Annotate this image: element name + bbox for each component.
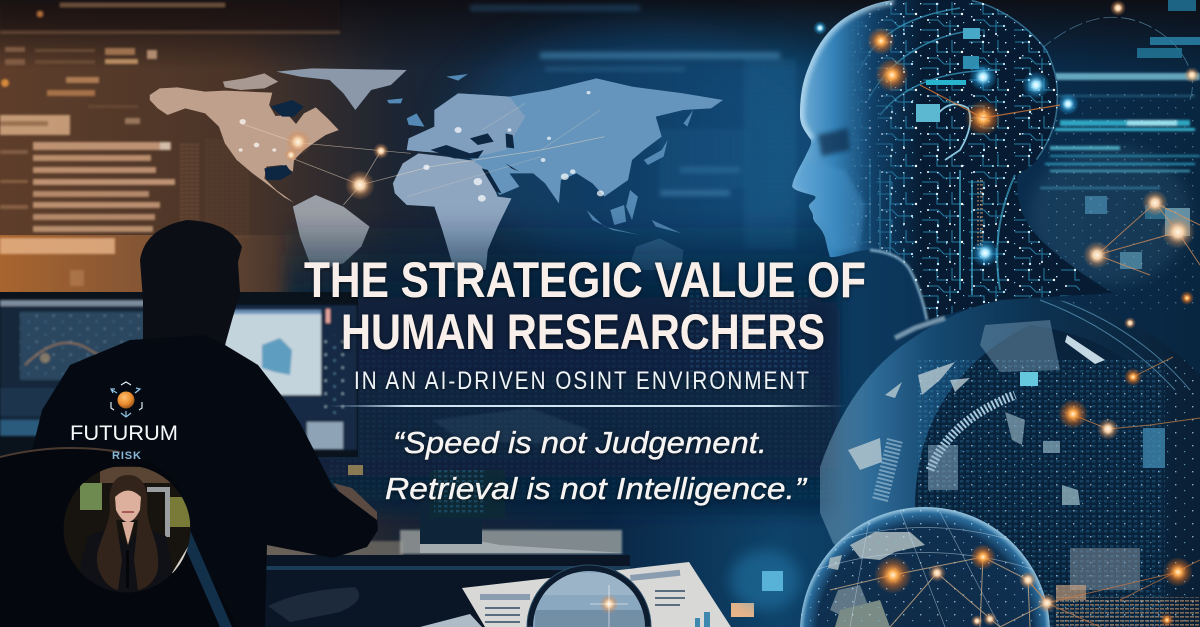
wordmark: FUTURUM — [70, 422, 178, 445]
quote: “Speed is not Judgement. — [393, 425, 767, 460]
chair — [0, 448, 359, 627]
sub-brand: RISK — [112, 450, 141, 462]
title — [304, 252, 866, 360]
North America — [150, 73, 339, 203]
face — [115, 490, 141, 522]
logo — [70, 382, 178, 462]
head — [140, 220, 242, 345]
city lights and connection lines — [241, 103, 604, 205]
centre text backdrop — [285, 215, 840, 515]
world map — [150, 68, 723, 270]
map light nodes — [284, 129, 389, 200]
portrait — [63, 465, 192, 593]
quote: Retrieval is not Intelligence.” — [385, 471, 808, 506]
continents — [848, 362, 970, 470]
shirt — [165, 536, 172, 573]
quote — [385, 425, 808, 506]
torso and arm — [0, 335, 378, 627]
Asian and Pacific islands — [387, 74, 693, 270]
Eurasia — [407, 78, 723, 203]
left monitor — [0, 300, 150, 436]
magnifying glass — [527, 565, 651, 627]
title: THE STRATEGIC VALUE OF — [304, 252, 866, 308]
background data right — [1020, 0, 1200, 310]
monitors — [0, 292, 363, 475]
divider line — [328, 405, 847, 407]
hair — [97, 475, 158, 590]
inland seas — [264, 100, 519, 193]
left data panel — [0, 0, 340, 286]
title: HUMAN RESEARCHERS — [341, 304, 825, 360]
body with digital world texture — [800, 283, 1200, 627]
logo icon — [111, 382, 142, 417]
person silhouette at desk — [0, 220, 378, 627]
Africa — [393, 153, 511, 270]
top data streaks centre — [470, 5, 795, 250]
desk with papers — [258, 470, 630, 627]
document and magnifying glass — [420, 562, 731, 627]
South America — [293, 195, 370, 270]
subtitle: IN AN AI-DRIVEN OSINT ENVIRONMENT — [354, 367, 811, 395]
right monitor — [218, 305, 357, 450]
Europe tint — [407, 93, 525, 158]
AI head with circuit brain — [785, 0, 1115, 338]
Greenland — [276, 68, 407, 110]
ear — [937, 104, 970, 160]
floating data squares — [730, 550, 800, 617]
globe — [800, 507, 1200, 627]
